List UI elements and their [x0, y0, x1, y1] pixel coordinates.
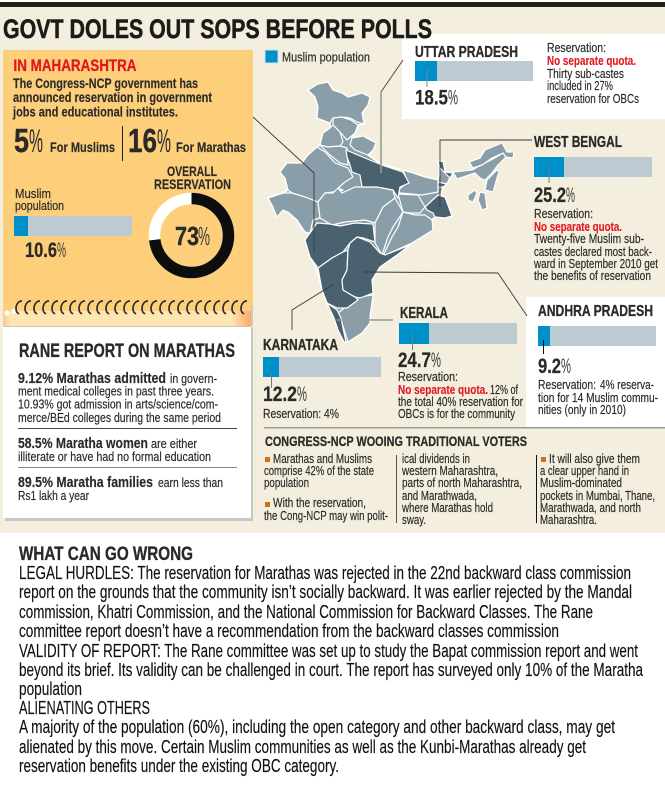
- text: Kerala reservation: [398, 369, 524, 421]
- stat: Maratha women: are either: [151, 436, 198, 451]
- text: West Bengal reservation: No separate quota.: [534, 219, 622, 234]
- text: Uttar Pradesh reservation: reservation for OBCs: [547, 91, 639, 106]
- stat: medical college admissions: [18, 370, 221, 425]
- value: 12.2%: 12.2: [263, 382, 297, 406]
- top rule: [0, 2, 665, 7]
- stat: Maratha families: 89.5% Maratha families: [18, 474, 153, 491]
- text: legal hurdles: [19, 562, 632, 641]
- heading: Overall reservation: RESERVATION: [154, 176, 231, 192]
- value: 9.2%: 9.2: [538, 354, 561, 378]
- column 1: population: [264, 475, 309, 490]
- column 2: where Marathas hold: [401, 500, 493, 515]
- block: West Bengal: %: [566, 184, 575, 207]
- panel: Maharashtra: [3, 50, 253, 311]
- label: Muslim population: [15, 186, 64, 213]
- stat: 16% for Marathas: 16: [128, 122, 157, 159]
- donut chart: 73%: %: [198, 221, 210, 251]
- column 1: comprise 42% of the state: [264, 463, 374, 478]
- stat: 5% for Muslims: 5: [14, 122, 29, 159]
- panel: Uttar Pradesh: [402, 34, 665, 119]
- column 3: Muslim-dominated: [540, 475, 622, 490]
- state: Maharashtra: [305, 223, 375, 268]
- column 3: [540, 451, 655, 527]
- heading: Rane report: RANE REPORT ON MARATHAS: [19, 341, 235, 362]
- stat: 16% for Marathas: %: [157, 123, 171, 159]
- stat: 5% for Muslims: [14, 122, 115, 159]
- text: Karnataka reservation: Reservation: 4%: [263, 406, 339, 421]
- state: Andhra Pradesh: [342, 237, 410, 298]
- stat: medical college admissions: ment medical colleges in past three years.: [18, 384, 214, 398]
- stat: 5% for Muslims: %: [29, 123, 43, 159]
- stat: Maratha families: Rs1 lakh a year: [18, 488, 90, 503]
- text: West Bengal reservation: [533, 206, 658, 283]
- panel: What can go wrong: [0, 533, 665, 790]
- stat: medical college admissions: merce/BEd colleges during the same period: [18, 410, 221, 425]
- donut chart: 73%: [154, 198, 228, 272]
- heading: wooing voters: CONGRESS-NCP WOOING TRADITIONAL VOTERS: [265, 434, 527, 449]
- text: Kerala reservation: Reservation:: [398, 369, 458, 384]
- text: validity of report: population: [19, 678, 82, 699]
- state: Karnataka: [318, 250, 358, 308]
- column 1: [264, 451, 388, 523]
- text: Uttar Pradesh reservation: [547, 40, 639, 106]
- heading: Overall reservation: OVERALL: [167, 163, 217, 179]
- bar: Uttar Pradesh Muslim population: [415, 61, 533, 87]
- text: government announcement: [12, 75, 212, 120]
- stat: Maratha women: illiterate or have had no formal education: [18, 449, 211, 464]
- legend: Muslim population: Muslim population: [282, 50, 370, 64]
- stat: medical college admissions: 10.93% got admission in arts/science/com-: [18, 396, 218, 412]
- state: West Bengal: [425, 161, 453, 218]
- text: Andhra Pradesh reservation: [538, 377, 658, 417]
- panel: Rane report on Marathas: [3, 327, 253, 521]
- value: 24.7%: 24.7: [398, 348, 431, 372]
- block: West Bengal: [533, 134, 658, 283]
- value: 18.5%: %: [448, 86, 458, 110]
- value: 9.2%: %: [561, 355, 571, 378]
- bar: West Bengal Muslim population: [534, 157, 652, 183]
- panel: Maharashtra: %: [57, 239, 66, 262]
- text: alienating others: [19, 697, 615, 776]
- text: Uttar Pradesh reservation: No separate quota.: [547, 53, 636, 68]
- text: Kerala reservation: No separate quota.: [398, 382, 488, 397]
- value: 12.2%: %: [297, 383, 307, 406]
- column 3: a clear upper hand in: [540, 463, 629, 478]
- column 2: sway.: [402, 512, 426, 527]
- heading: In Maharashtra: IN MAHARASHTRA: [14, 56, 136, 75]
- stat: 5% for Muslims: For Muslims: [50, 139, 115, 155]
- bar: Kerala Muslim population: [399, 323, 517, 350]
- text: government announcement: jobs and educational institutes.: [12, 104, 178, 120]
- heading: Kerala: KERALA: [400, 305, 448, 322]
- stat: Maratha women: 58.5% Maratha women: [18, 435, 148, 452]
- section: Congress-NCP wooing traditional voters: [264, 434, 655, 527]
- text: Kerala reservation: OBCs is for the community: [398, 406, 515, 421]
- heading: Overall reservation: [154, 163, 231, 192]
- text: alienating others: reservation benefits under the existing OBC category.: [19, 755, 339, 776]
- text: West Bengal reservation: Reservation:: [534, 206, 593, 221]
- heading: What can go wrong: WHAT CAN GO WRONG: [19, 544, 193, 565]
- column 3: It will also give them: [549, 451, 640, 466]
- bar: Maharashtra Muslim population: [14, 216, 132, 236]
- text: government announcement: announced reservation in government: [13, 89, 212, 105]
- panel: Andhra Pradesh: [526, 297, 665, 427]
- column 2: parts of north Maharashtra,: [402, 475, 522, 490]
- stat: 16% for Marathas: [128, 122, 246, 159]
- label: Muslim population: Muslim: [15, 186, 51, 201]
- column 3: Maharashtra.: [540, 512, 597, 527]
- title: GOVT DOLES OUT SOPS BEFORE POLLS: [3, 14, 432, 44]
- value: 25.2%: 25.2: [534, 183, 566, 207]
- heading: Uttar Pradesh: UTTAR PRADESH: [415, 44, 518, 61]
- text: Andhra Pradesh reservation: Reservation:: [538, 377, 596, 392]
- block: Karnataka: [263, 337, 381, 421]
- text: government announcement: The Congress-NCP government has: [13, 75, 198, 91]
- block: Kerala: [398, 305, 524, 421]
- text: Kerala reservation: the total 40% reservation for: [398, 394, 524, 409]
- stat: 16% for Marathas: For Marathas: [176, 139, 246, 155]
- column 1: the Cong-NCP may win polit-: [264, 508, 388, 523]
- bar: Andhra Pradesh Muslim population: [538, 326, 656, 354]
- text: Kerala reservation: 12% of: [490, 382, 518, 397]
- stat: Maratha families: [18, 474, 223, 503]
- bar: Karnataka Muslim population: [263, 357, 381, 388]
- column 1: Marathas and Muslims: [273, 451, 372, 466]
- text: Andhra Pradesh reservation: nities (only in 2010): [538, 402, 626, 417]
- donut chart: 73%: 73: [175, 221, 199, 251]
- map of India: [268, 82, 514, 342]
- value: 18.5%: 18.5: [415, 86, 448, 110]
- notebook spiral binding: [3, 301, 253, 328]
- stat: medical college admissions: in govern-: [170, 371, 217, 386]
- column 2: western Maharashtra,: [401, 463, 498, 478]
- label: Muslim population: population: [15, 198, 64, 213]
- text: validity of report: [19, 640, 644, 699]
- state: Kerala: [327, 303, 346, 342]
- column 2: ical dividends in: [402, 451, 470, 466]
- value: 24.7%: %: [431, 349, 441, 372]
- heading: West Bengal: WEST BENGAL: [534, 134, 622, 151]
- text: Uttar Pradesh reservation: included in 27%: [547, 78, 613, 93]
- text: alienating others: ALIENATING OTHERS: [19, 697, 150, 718]
- leader lines: [253, 60, 532, 330]
- value: 10.6%: 10.6: [25, 238, 57, 262]
- stat: Maratha families: earn less than: [158, 475, 223, 490]
- state: Uttar Pradesh: [346, 150, 409, 198]
- text: Uttar Pradesh reservation: Reservation:: [547, 40, 606, 55]
- stat: Maratha women: [18, 435, 211, 464]
- text: Uttar Pradesh reservation: Thirty sub-castes: [547, 66, 624, 81]
- column 2: and Marathwada,: [402, 488, 477, 503]
- column 2: [401, 451, 522, 527]
- heading: Karnataka: KARNATAKA: [263, 337, 338, 354]
- column 1: With the reservation,: [273, 495, 366, 510]
- stat: medical college admissions: 9.12% Marathas admitted: [18, 370, 166, 387]
